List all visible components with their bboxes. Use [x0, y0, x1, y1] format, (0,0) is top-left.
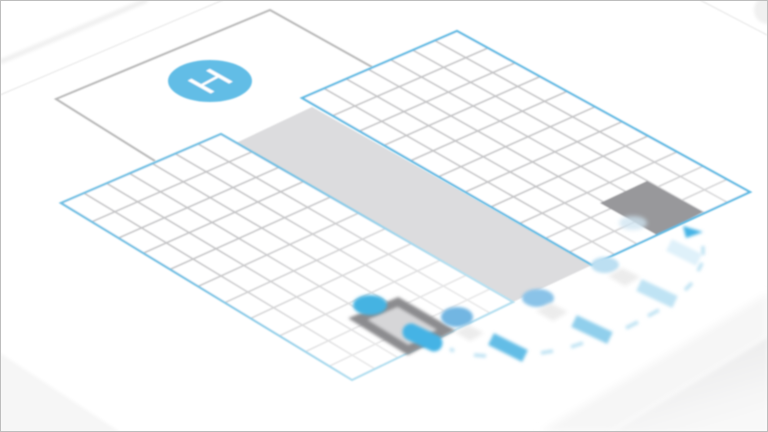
- moving blue bar: [411, 332, 434, 343]
- ghost marker on dark cell: [619, 216, 647, 230]
- icon: H badge: [168, 60, 252, 102]
- panel: header block: [56, 10, 372, 161]
- icon: H badge: H: [177, 63, 243, 99]
- faint gray ghost cells: [455, 268, 640, 341]
- panel: left grid: [61, 134, 513, 380]
- marker circles: [353, 257, 619, 327]
- blue sequence bars: [491, 245, 699, 356]
- panel: right grid: [302, 31, 750, 265]
- selected cell frame: [358, 302, 446, 350]
- gray strip: [236, 107, 592, 302]
- dark gray cell: [600, 181, 703, 235]
- dashed arc arrow: [450, 226, 703, 356]
